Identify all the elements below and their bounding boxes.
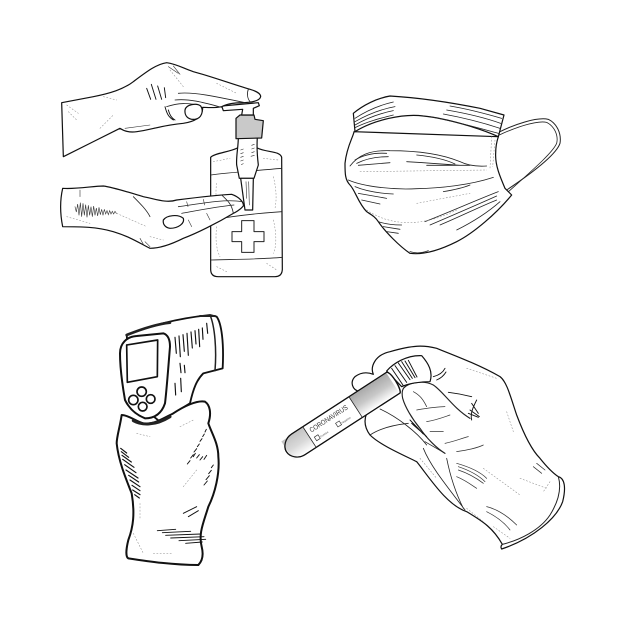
icon: thermometer buttons (129, 387, 155, 411)
icon: thermometer body (120, 315, 223, 422)
icon: pump nozzle (222, 103, 259, 115)
icon: thermometer front panel (120, 333, 170, 418)
icon: gloved hand (117, 401, 219, 565)
palm shading (75, 203, 116, 217)
thumb (403, 382, 470, 453)
icon: upper hand pressing pump (62, 63, 261, 157)
label text: CORONAVIRUS (309, 404, 350, 434)
tube label: Negative (341, 415, 352, 425)
icon: ear loop (499, 119, 560, 193)
tube label (303, 397, 362, 447)
illustration: infrared thermometer in gloved hand (117, 315, 223, 565)
icon: lower open hand (61, 186, 243, 248)
illustration: surgical face mask (345, 96, 560, 254)
glove cuff (502, 477, 560, 544)
mask folds (348, 97, 500, 253)
icon: pump collar (236, 115, 263, 139)
icon: glove (352, 346, 565, 549)
icon: sanitizer bottle (211, 103, 282, 277)
icon: test tube with label (280, 371, 402, 462)
icon: mask body (345, 97, 512, 254)
icon: mask top band (353, 96, 504, 137)
illustration: sanitizer bottle with two hands (61, 63, 282, 277)
icon: test tube cap (387, 356, 431, 387)
illustration: gloved hand holding test tube (280, 346, 565, 549)
icon: medical cross (232, 221, 264, 252)
icon: thermometer screen (127, 340, 158, 382)
tube label: Positive (319, 430, 330, 438)
